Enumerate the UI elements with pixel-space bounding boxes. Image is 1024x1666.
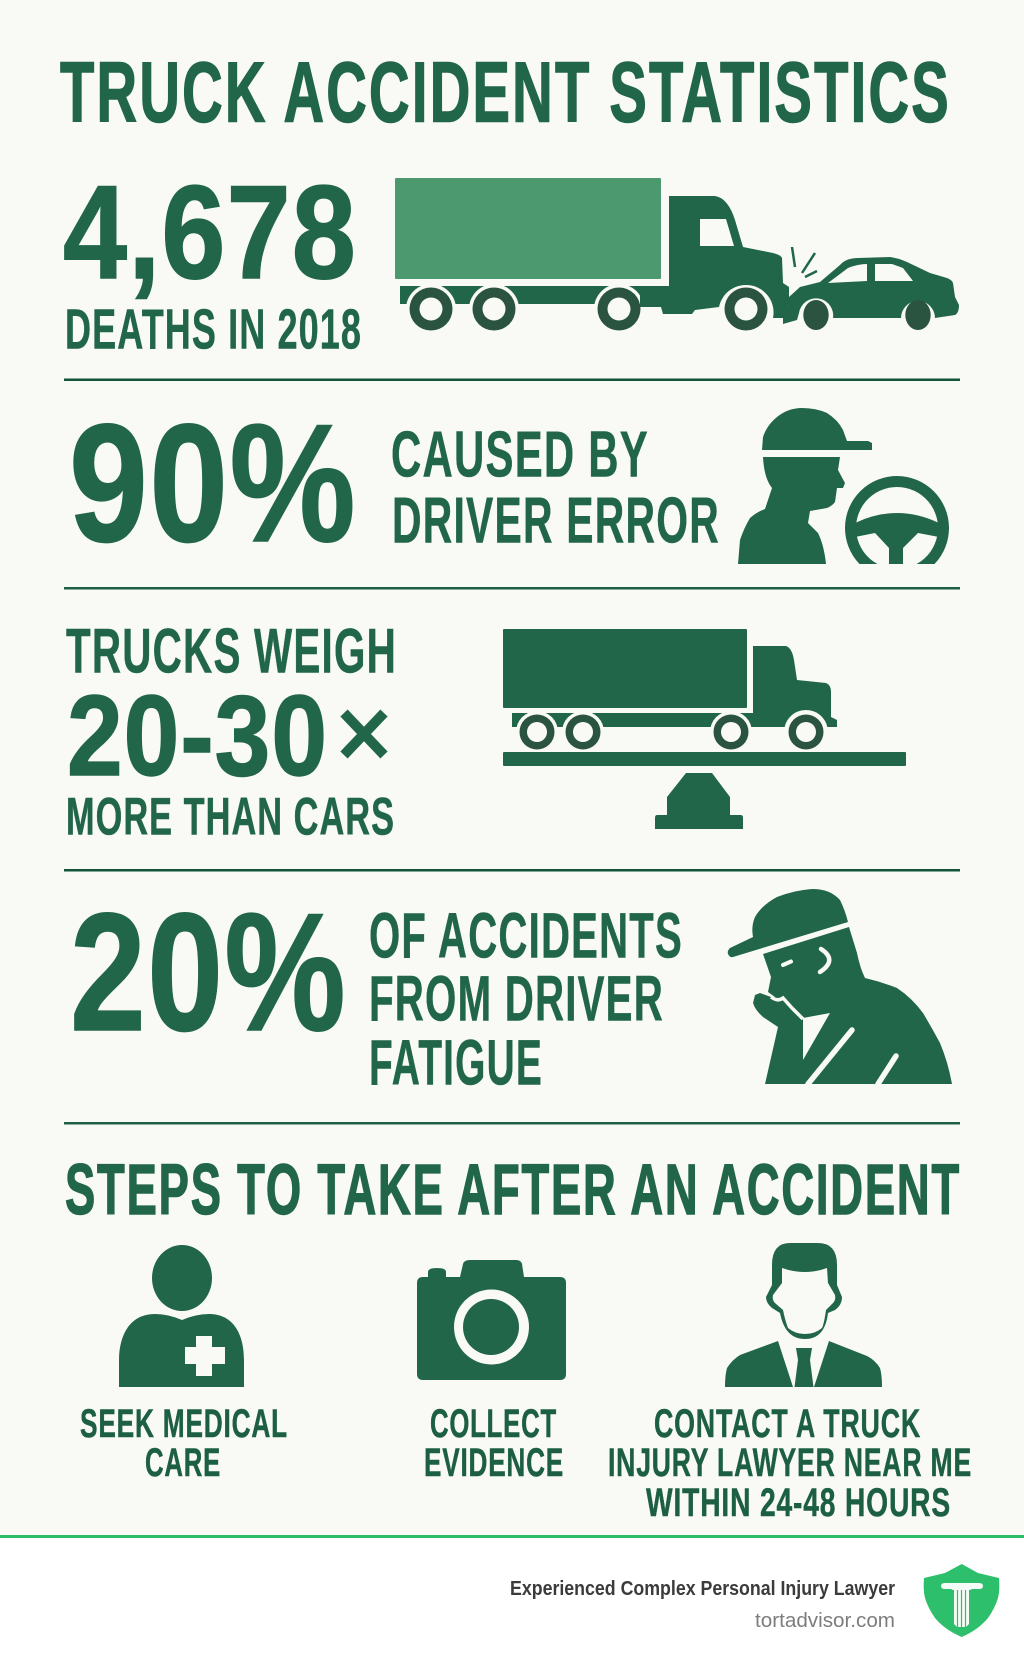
panel: deaths in 2018 xyxy=(63,159,959,362)
label: collect evidence: EVIDENCE xyxy=(424,1441,564,1485)
label: collect evidence: COLLECT xyxy=(430,1402,557,1446)
text: caused by driver error: CAUSED BY xyxy=(391,418,649,490)
label: seek medical care: CARE xyxy=(145,1441,221,1485)
stat: 4,678: 4,678 xyxy=(63,159,357,307)
icon: medical person xyxy=(119,1245,244,1387)
icon: driver with steering wheel xyxy=(738,408,949,564)
icon: camera xyxy=(417,1260,566,1380)
panel: truck weight xyxy=(66,616,906,846)
text: trucks weigh: TRUCKS WEIGH xyxy=(66,616,397,686)
icon: shield logo xyxy=(924,1564,999,1637)
label: collect evidence xyxy=(424,1402,564,1485)
icon: lawyer xyxy=(725,1243,882,1387)
text: caused by driver error: DRIVER ERROR xyxy=(392,484,720,556)
label: seek medical care xyxy=(80,1402,288,1485)
panel: driver error xyxy=(69,389,949,577)
text: more than cars: MORE THAN CARS xyxy=(66,788,395,846)
icon: truck hitting car xyxy=(395,178,959,334)
label: seek medical care: SEEK MEDICAL xyxy=(80,1402,288,1446)
panel: step seek medical care xyxy=(80,1245,288,1485)
label: deaths in 2018: DEATHS IN 2018 xyxy=(65,298,362,362)
footer: firm details xyxy=(510,1578,895,1632)
text: of accidents from driver fatigue: OF ACCIDENTS xyxy=(369,900,683,972)
stat: 20-30 times: 20-30 xyxy=(67,673,328,800)
icon: tired driver xyxy=(728,889,952,1084)
text: of accidents from driver fatigue: FROM DRIVER xyxy=(369,962,664,1034)
label: contact lawyer xyxy=(608,1402,972,1525)
icon: truck on scale xyxy=(503,629,906,829)
text: of accidents from driver fatigue xyxy=(369,900,683,1098)
footer: firm details: Experienced Complex Personal Injury Lawyer xyxy=(510,1578,895,1600)
stat: 90%: 90% xyxy=(69,389,357,577)
stat: 20%: 20% xyxy=(70,878,347,1066)
text: of accidents from driver fatigue: FATIGUE xyxy=(369,1026,543,1098)
panel: step contact lawyer xyxy=(608,1243,972,1525)
panel: step collect evidence xyxy=(417,1260,566,1485)
footer: firm details: tortadvisor.com xyxy=(755,1610,895,1632)
text: caused by driver error xyxy=(391,418,720,556)
panel: driver fatigue xyxy=(70,878,952,1098)
